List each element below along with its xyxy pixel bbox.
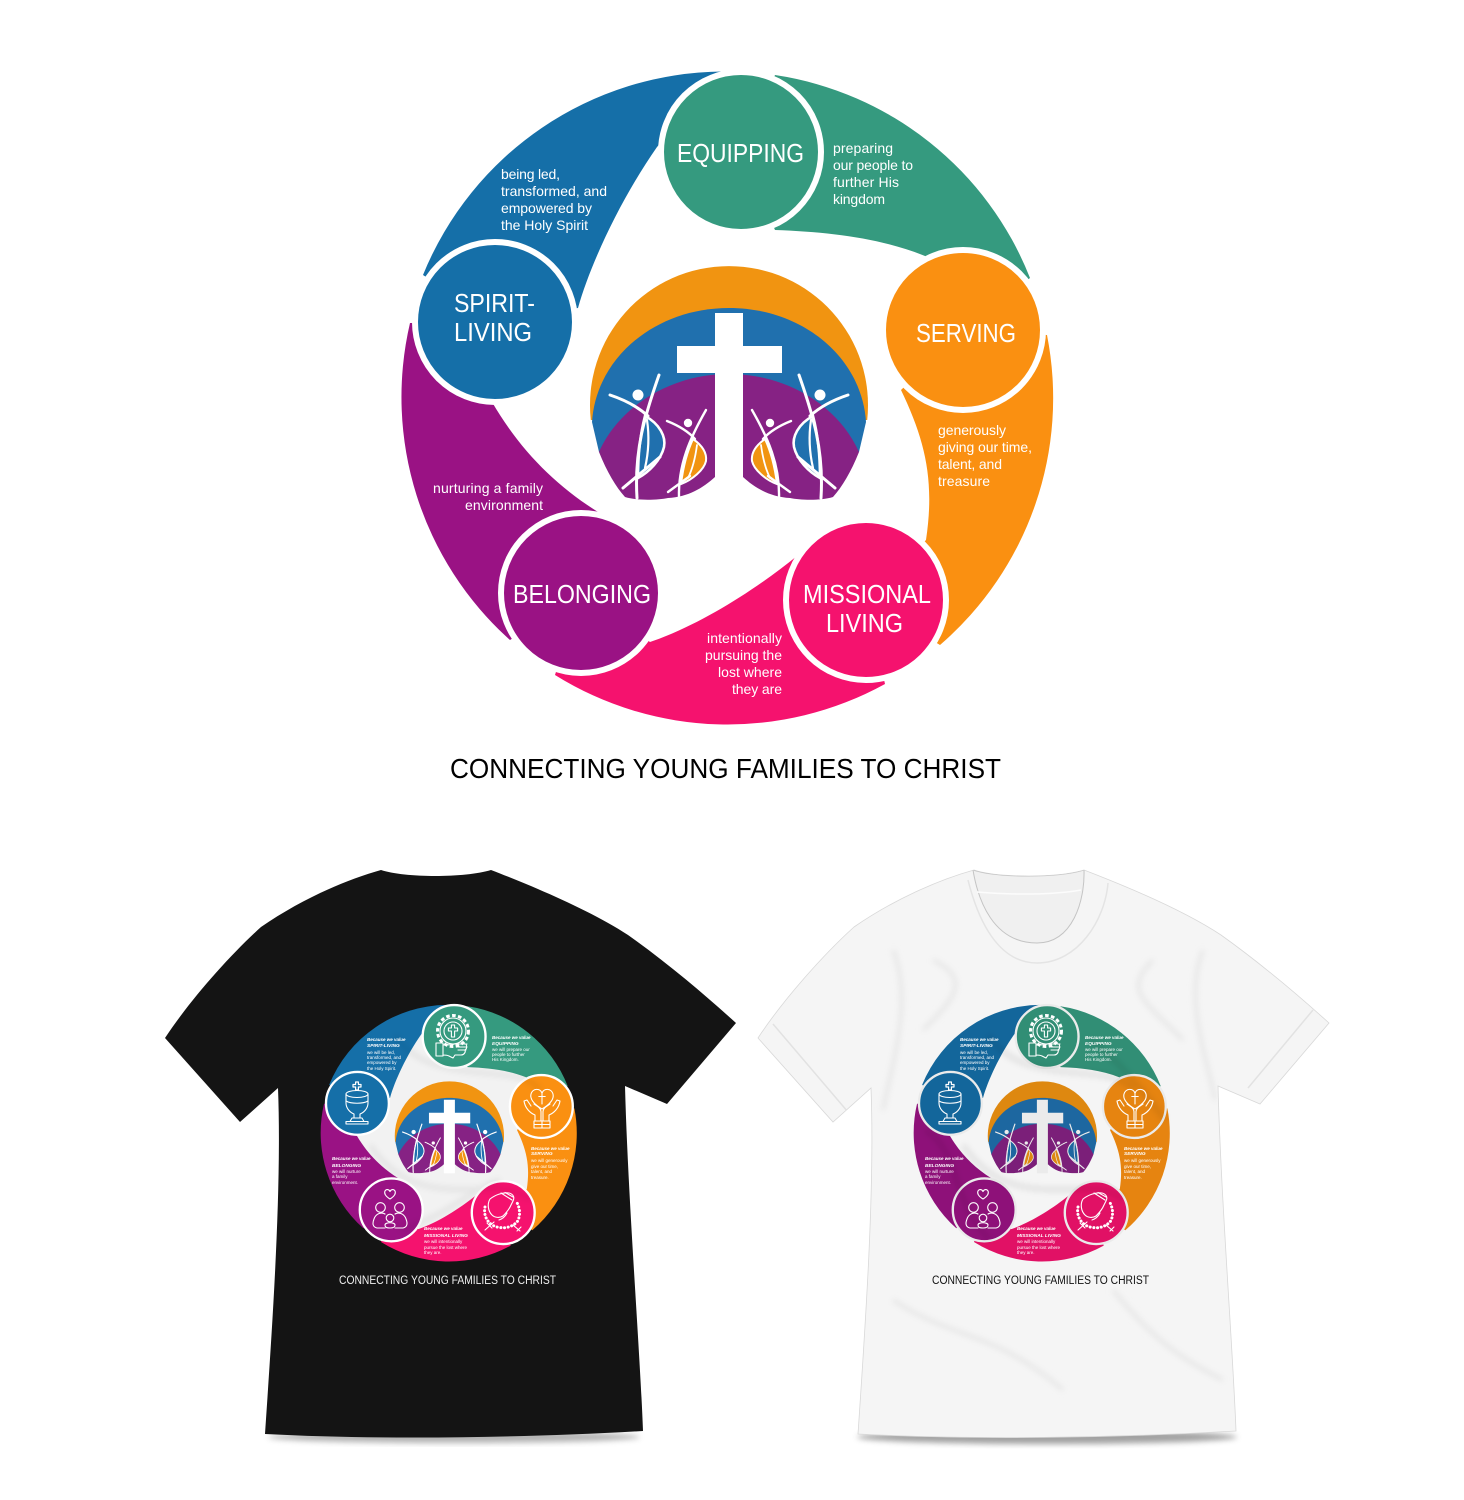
text: serving description: treasure — [938, 473, 990, 489]
print text: spirit-living — [960, 1037, 999, 1071]
print text: belonging: environment. — [925, 1180, 951, 1185]
print text: missional living: MISSIONAL LIVING — [424, 1233, 468, 1239]
icon: hearts and hands — [524, 1089, 560, 1128]
circle: spirit-living — [415, 242, 575, 402]
print text: serving: give our time, — [531, 1164, 558, 1169]
icon: gear and hand — [1029, 1016, 1062, 1058]
text: spirit-living description: transformed, and — [501, 183, 607, 199]
t-shirt: white — [758, 870, 1329, 1444]
text: serving description: generously — [938, 422, 1006, 438]
segment: spirit-living — [423, 72, 722, 322]
print text: spirit-living: SPIRIT-LIVING — [960, 1043, 993, 1049]
heading: SPIRIT-LIVING: SPIRIT- — [454, 288, 535, 318]
segment: serving — [866, 330, 1053, 645]
print text: belonging — [925, 1156, 964, 1185]
text: spirit-living description: the Holy Spirit — [501, 217, 588, 233]
print text: equipping: we will prepare our — [1085, 1047, 1123, 1052]
print text: spirit-living: Because we value — [960, 1037, 999, 1042]
print text: belonging: Because we value — [332, 1156, 371, 1161]
circle: missional living — [786, 520, 946, 680]
print text: equipping: His Kingdom. — [492, 1057, 519, 1062]
print text: serving: give our time, — [1124, 1164, 1151, 1169]
print text: spirit-living: Because we value — [367, 1037, 406, 1042]
text: missional living description — [705, 630, 782, 697]
shirt body — [165, 870, 736, 1438]
print text: equipping: Because we value — [1085, 1035, 1124, 1040]
print tagline: CONNECTING YOUNG FAMILIES TO CHRIST — [932, 1275, 1149, 1287]
text: serving description: giving our time, — [938, 439, 1032, 455]
heading: EQUIPPING: EQUIPPING — [677, 138, 804, 168]
text: missional living description: lost where — [718, 664, 782, 680]
shirt print: wheel — [323, 1007, 575, 1259]
shirt shadow — [268, 1431, 640, 1443]
circle: equipping — [661, 72, 821, 232]
print text: missional living: Because we value — [1017, 1226, 1056, 1231]
print text: spirit-living: empowered by — [367, 1060, 397, 1065]
print text: serving: Because we value — [531, 1146, 570, 1151]
shirt shadow — [857, 1430, 1237, 1444]
print text: missional living: they are. — [1017, 1250, 1035, 1255]
print text: missional living — [424, 1226, 468, 1255]
icon: praying hands with rosary — [1078, 1192, 1114, 1231]
icon: praying hands with rosary — [485, 1192, 521, 1231]
heading: SPIRIT-LIVING: LIVING — [454, 317, 532, 347]
segment: missional living — [555, 556, 885, 724]
tagline: CONNECTING YOUNG FAMILIES TO CHRIST — [450, 753, 1001, 784]
print text: equipping — [492, 1035, 531, 1062]
print text: spirit-living: the Holy Spirit. — [960, 1066, 989, 1071]
text: belonging description: environment — [465, 497, 543, 513]
print text: serving — [1124, 1146, 1163, 1180]
text: missional living description: pursuing the — [705, 647, 782, 663]
print text: belonging: BELONGING — [925, 1163, 954, 1169]
text: equipping description: preparing — [833, 140, 893, 156]
text: serving description: talent, and — [938, 456, 1002, 472]
icon: family — [373, 1190, 407, 1228]
shirt print: wheel — [914, 1005, 1170, 1262]
print text: missional living — [1017, 1226, 1061, 1255]
text: equipping description — [833, 140, 913, 207]
print text: equipping: EQUIPPING — [492, 1041, 519, 1047]
print text: belonging: environment. — [332, 1180, 358, 1185]
print text: spirit-living: SPIRIT-LIVING — [367, 1043, 400, 1049]
print text: spirit-living: we will be led, — [367, 1050, 395, 1055]
text: serving description — [938, 422, 1032, 489]
print text: spirit-living: transformed, and — [960, 1055, 995, 1060]
print text: equipping: we will prepare our — [492, 1047, 530, 1052]
print text: spirit-living: empowered by — [960, 1060, 990, 1065]
print text: serving: Because we value — [1124, 1146, 1163, 1151]
print text: missional living: they are. — [424, 1250, 442, 1255]
print text: spirit-living: the Holy Spirit. — [367, 1066, 396, 1071]
print tagline: CONNECTING YOUNG FAMILIES TO CHRIST — [339, 1275, 556, 1287]
text: spirit-living description — [501, 166, 607, 233]
text: equipping description: our people to — [833, 157, 913, 173]
print text: missional living: pursue the lost where — [1017, 1245, 1061, 1250]
text: spirit-living description: empowered by — [501, 200, 592, 216]
segment: belonging — [401, 322, 598, 640]
print text: belonging — [332, 1156, 371, 1185]
segment: equipping — [741, 75, 1030, 330]
print text: belonging: we will nurture — [925, 1169, 954, 1174]
wheel: core values main diagram — [401, 72, 1053, 724]
t-shirt: black — [165, 870, 736, 1443]
print text: equipping: EQUIPPING — [1085, 1041, 1112, 1047]
print text: equipping: people to further — [492, 1052, 525, 1057]
print text: belonging: BELONGING — [332, 1163, 361, 1169]
text: equipping description: kingdom — [833, 191, 885, 207]
print text: serving: we will generously — [1124, 1158, 1161, 1163]
print text: serving: SERVING — [1124, 1151, 1146, 1157]
icon: gear and hand — [436, 1016, 468, 1058]
print text: missional living: we will intentionally — [1017, 1239, 1056, 1244]
text: missional living description: they are — [732, 681, 782, 697]
print text: spirit-living — [367, 1037, 406, 1071]
print text: belonging: a family — [332, 1174, 348, 1179]
print text: equipping: His Kingdom. — [1085, 1057, 1112, 1062]
shirt body — [758, 870, 1329, 1438]
text: missional living description: intentionally — [707, 630, 782, 646]
print text: belonging: Because we value — [925, 1156, 964, 1161]
print text: equipping: Because we value — [492, 1035, 531, 1040]
icon: hearts and hands — [1117, 1089, 1153, 1128]
print text: belonging: we will nurture — [332, 1169, 361, 1174]
print text: missional living: we will intentionally — [424, 1239, 463, 1244]
print text: equipping — [1085, 1035, 1124, 1062]
text: belonging description: nurturing a family — [433, 480, 543, 496]
icon: family — [966, 1190, 1000, 1228]
text: spirit-living description: being led, — [501, 166, 560, 182]
print text: missional living: MISSIONAL LIVING — [1017, 1233, 1061, 1239]
print text: spirit-living: transformed, and — [367, 1055, 402, 1060]
heading: BELONGING: BELONGING — [513, 579, 651, 609]
print text: serving: SERVING — [531, 1151, 553, 1157]
icon: goblet — [346, 1082, 368, 1124]
heading: SPIRIT-LIVING — [454, 288, 535, 347]
print text: serving: talent, and — [531, 1169, 553, 1174]
heading: MISSIONAL LIVING: MISSIONAL — [803, 579, 931, 609]
logo: cross with dancing figures — [590, 266, 868, 500]
print text: serving: talent, and — [1124, 1169, 1146, 1174]
text: belonging description — [433, 480, 543, 513]
circle: serving — [883, 250, 1043, 410]
heading: MISSIONAL LIVING — [803, 579, 931, 638]
heading: MISSIONAL LIVING: LIVING — [826, 608, 903, 638]
heading: SERVING: SERVING — [916, 318, 1016, 348]
print text: serving — [531, 1146, 570, 1180]
print text: serving: we will generously — [531, 1158, 568, 1163]
icon: goblet — [939, 1082, 961, 1124]
print text: spirit-living: we will be led, — [960, 1050, 988, 1055]
print text: belonging: a family — [925, 1174, 941, 1179]
print text: serving: treasure. — [1124, 1175, 1142, 1180]
circle: belonging — [501, 513, 661, 673]
print text: serving: treasure. — [531, 1175, 549, 1180]
print text: missional living: pursue the lost where — [424, 1245, 468, 1250]
print text: equipping: people to further — [1085, 1052, 1118, 1057]
text: equipping description: further His — [833, 174, 899, 190]
print text: missional living: Because we value — [424, 1226, 463, 1231]
